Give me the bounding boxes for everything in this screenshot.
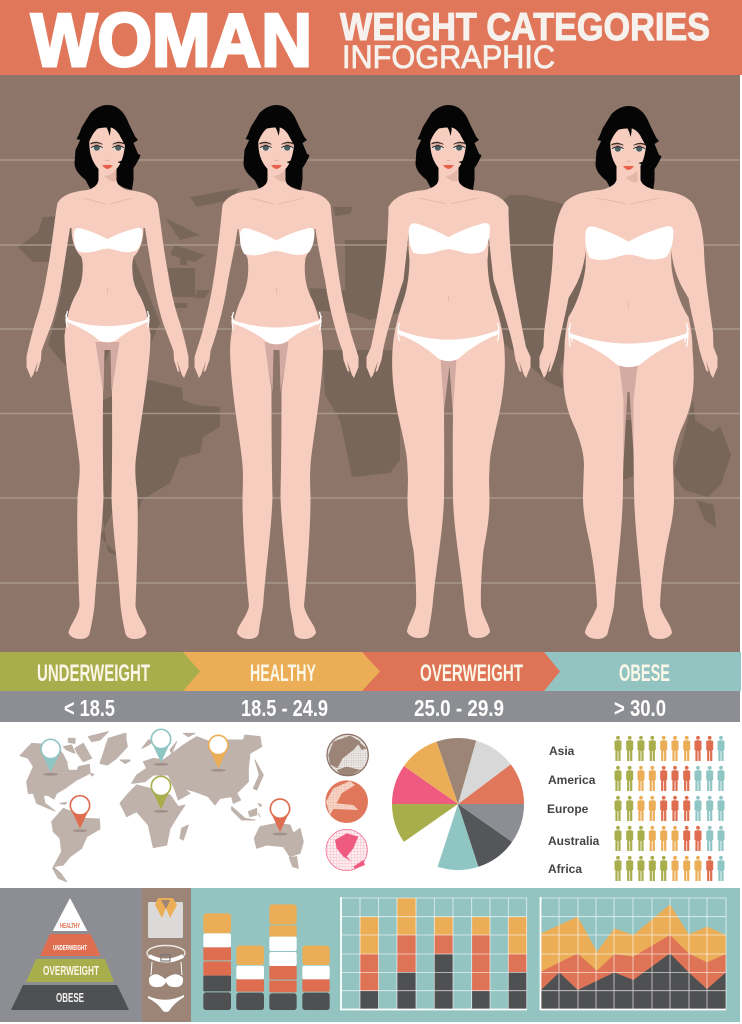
icon: bra — [149, 962, 183, 987]
globes — [325, 734, 369, 871]
value: 18.5 to 24.9: 18.5 - 24.9 — [241, 695, 328, 721]
stack 1 — [203, 913, 231, 1010]
map: the Americas and Greenland — [20, 732, 130, 882]
pyramid tier: healthy: HEALTHY — [60, 923, 80, 930]
globe: pink — [326, 829, 368, 871]
pyramid tier: underweight — [40, 934, 101, 956]
pyramid tier: underweight: UNDERWEIGHT — [53, 945, 87, 952]
label: obese: OBESE — [619, 660, 670, 687]
pin: asia — [209, 735, 228, 772]
pyramid tier: overweight — [26, 959, 114, 982]
pin: australia — [270, 799, 290, 835]
pictogram chart: regions — [547, 736, 724, 881]
pyramid tier: overweight: OVERWEIGHT — [43, 963, 99, 978]
world map with pins — [20, 729, 303, 882]
panel: body types background — [0, 75, 740, 652]
stack 3 — [269, 904, 297, 1010]
woman 2: healthy — [194, 105, 358, 639]
pyramid tier: obese — [11, 985, 129, 1010]
woman 3: overweight — [366, 105, 530, 638]
woman 1: underweight — [26, 105, 188, 639]
stack 2 — [236, 946, 264, 1010]
row: America — [548, 766, 724, 791]
row: Europe: Europe — [547, 802, 589, 816]
panel: teal charts — [191, 888, 740, 1022]
pin: europe — [151, 729, 171, 766]
subtitle: infographic: INFOGRAPHIC — [342, 39, 555, 75]
row: America: America — [548, 773, 596, 787]
pie chart — [392, 738, 524, 870]
icon: shirt — [148, 898, 183, 938]
label: healthy: HEALTHY — [250, 660, 316, 687]
map: Eurasia, Africa and Australia — [120, 733, 303, 868]
row: Africa: Africa — [548, 862, 582, 876]
row: Asia — [549, 736, 724, 761]
pin: africa — [151, 776, 171, 813]
label: overweight: OVERWEIGHT — [420, 660, 523, 687]
globe: orange — [325, 780, 368, 823]
row: Europe — [547, 796, 724, 821]
panel: clothing icons — [142, 888, 191, 1022]
row: Africa — [548, 856, 724, 881]
pyramid tier: obese: OBESE — [56, 990, 84, 1005]
globe: taupe — [327, 734, 369, 776]
BMI range bar — [0, 691, 740, 722]
background world map — [18, 188, 731, 562]
header banner — [0, 0, 742, 82]
stacked coin chart — [203, 904, 330, 1010]
woman 4: obese — [540, 106, 718, 639]
stack 4 — [302, 946, 330, 1010]
panel: pyramid — [0, 888, 142, 1022]
area chart — [540, 897, 726, 1010]
pyramid tier: healthy — [53, 898, 87, 931]
category ribbon — [0, 652, 741, 691]
icon: panties — [148, 995, 184, 1012]
label: underweight: UNDERWEIGHT — [37, 660, 150, 687]
row: Australia — [548, 826, 724, 851]
stacked bar chart — [341, 897, 527, 1010]
title: WOMAN: WOMAN — [31, 0, 312, 82]
value: under 18.5: < 18.5 — [64, 695, 115, 721]
row: Australia: Australia — [548, 834, 600, 848]
value: 25.0 to 29.9: 25.0 - 29.9 — [414, 695, 504, 721]
row: Asia: Asia — [549, 744, 575, 758]
icon: belt — [147, 946, 185, 961]
pin: south america — [70, 796, 90, 832]
pin: north america — [41, 739, 60, 776]
value: over 30.0: > 30.0 — [614, 695, 666, 721]
